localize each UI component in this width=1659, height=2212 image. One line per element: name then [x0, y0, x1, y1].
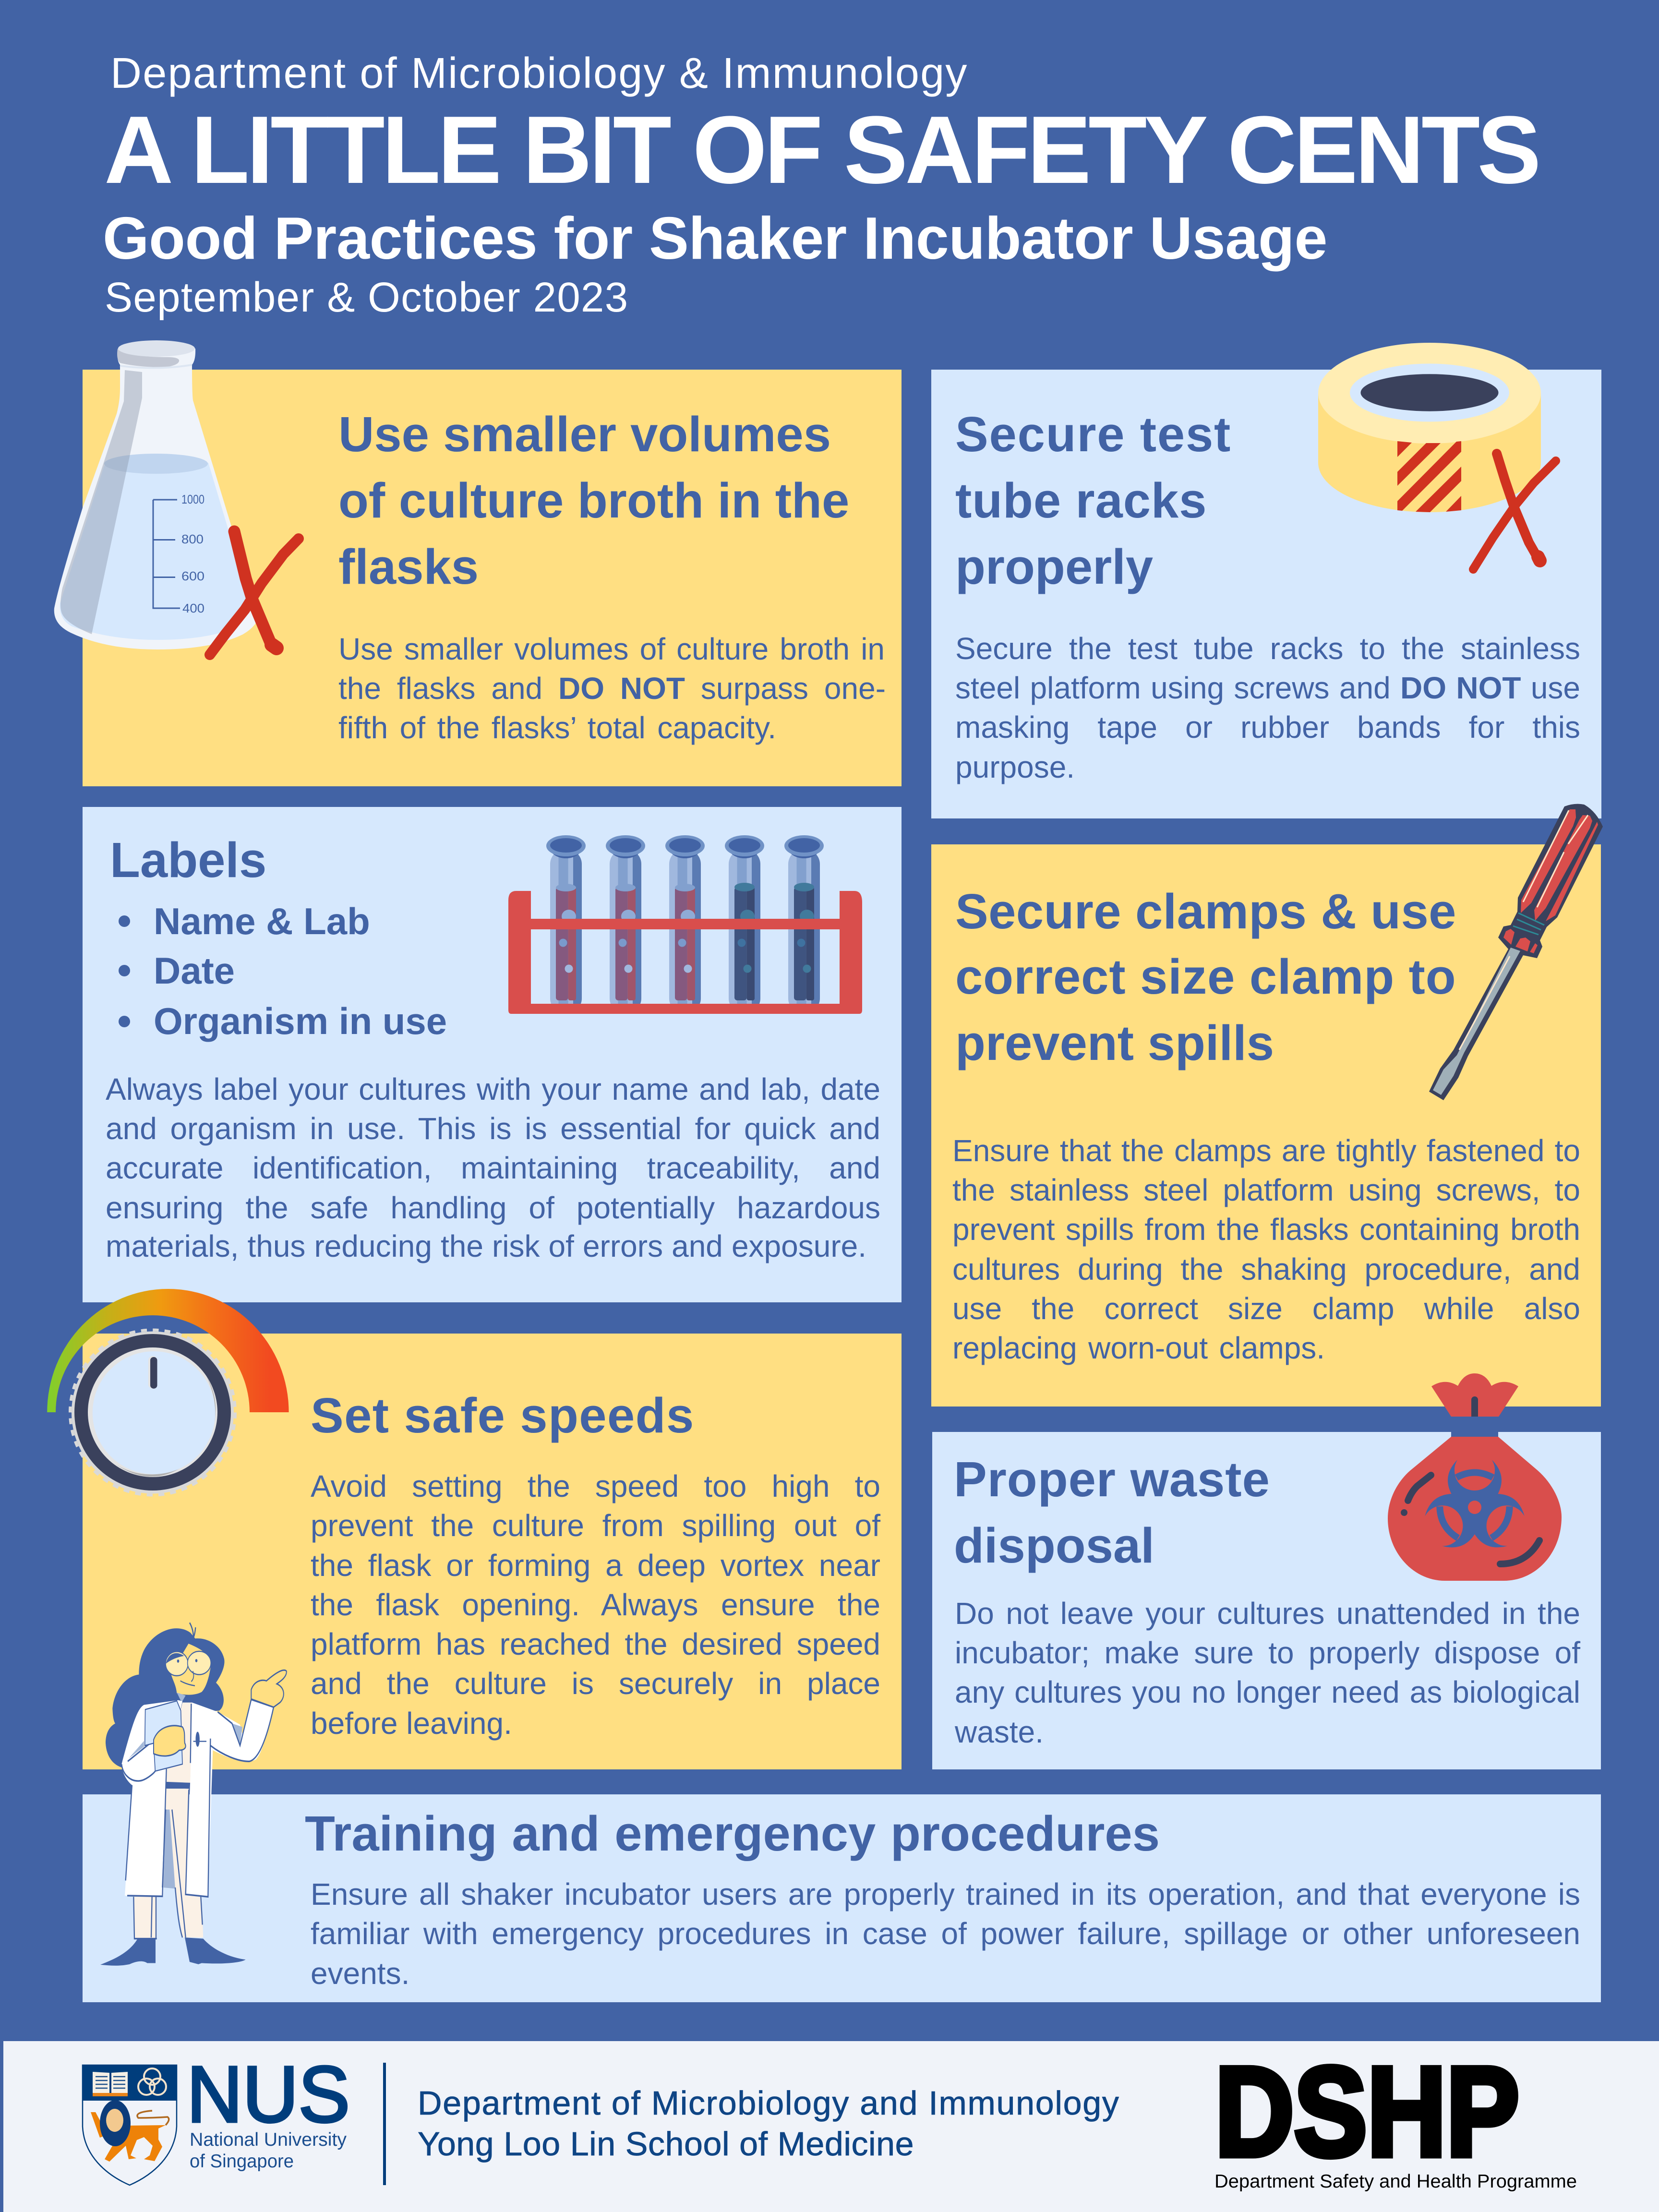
shaft [1433, 948, 1520, 1095]
text: labels: ensuring the safe handling of potentially hazardous [106, 1190, 880, 1225]
flask shading [60, 370, 142, 634]
illustration: scientist pointing [86, 1613, 302, 1978]
pen in pocket [193, 1732, 206, 1747]
panel: test tube racks [931, 370, 1601, 818]
text: smaller volumes: fifth of the flasks’ total capacity. [338, 710, 776, 745]
pointing hand [251, 1670, 287, 1707]
highlights [1459, 810, 1588, 1050]
flask cap [117, 340, 195, 368]
heading: waste disposal: Proper waste [954, 1452, 1270, 1507]
icon: screwdriver [1421, 797, 1608, 1106]
heading: test tube racks [955, 407, 1231, 594]
text: test tube racks: masking tape or rubber bands for this [955, 710, 1580, 745]
tape stripes [1397, 441, 1461, 512]
text: safe speeds: and the culture is securely in place [311, 1666, 880, 1701]
text: waste disposal [954, 1596, 1580, 1749]
heading: smaller volumes: of culture broth in the [338, 473, 849, 528]
text: labels [106, 1072, 880, 1263]
water [60, 454, 250, 640]
heading: waste disposal: disposal [954, 1518, 1154, 1573]
NUS wordmark [187, 2050, 350, 2172]
list: label items: Organism in use [154, 1000, 447, 1042]
red cross [1473, 454, 1556, 569]
knob [70, 1330, 235, 1495]
graduation scale [153, 500, 180, 608]
text: test tube racks: Secure the test tube racks to the stainless [955, 631, 1580, 666]
legs outline [133, 1887, 203, 1939]
NUS wordmark: of Singapore [190, 2151, 294, 2172]
icon: biohazard waste bag [1378, 1368, 1570, 1584]
department name: Department of Microbiology and Immunology [418, 2084, 1120, 2122]
panel: labels [83, 807, 902, 1302]
list: label items: Name & Lab [154, 900, 370, 942]
text: waste disposal: any cultures you no longer need as biological [955, 1675, 1580, 1709]
logo: NUS [79, 2059, 358, 2189]
scale numbers: 400 [182, 601, 204, 615]
text: safe speeds: before leaving. [311, 1706, 512, 1741]
DSHP programme name: Department Safety and Health Programme [1214, 2171, 1577, 2192]
icon: test tube rack [508, 835, 862, 1014]
flask glass [54, 349, 259, 649]
title: A LITTLE BIT OF SAFETY CENTS [104, 96, 1539, 204]
list: label items [119, 900, 447, 1042]
divider [383, 2063, 386, 2185]
text: test tube racks: steel platform using screws and DO NOT use [955, 671, 1580, 705]
scale numbers [181, 492, 204, 615]
text: smaller volumes [338, 632, 886, 745]
heading: smaller volumes: Use smaller volumes [338, 407, 831, 462]
scale numbers: 600 [181, 569, 204, 583]
face [166, 1644, 211, 1703]
icon: flask with red cross [48, 331, 307, 667]
biohazard symbol [1420, 1460, 1529, 1554]
scale numbers: 800 [181, 532, 204, 546]
text: clamps: cultures during the shaking procedure, and [952, 1252, 1580, 1286]
heading: test tube racks: properly [955, 539, 1153, 594]
text: safe speeds: prevent the culture from spilling out of [311, 1508, 880, 1543]
tape roll [1318, 343, 1541, 512]
handle grooves [1503, 809, 1598, 953]
text: safe speeds: the flask opening. Always ensure the [311, 1587, 880, 1622]
department name: Yong Loo Lin School of Medicine [418, 2125, 914, 2163]
text: labels: accurate identification, maintaining traceability, and [106, 1151, 880, 1185]
text: clamps: prevent spills from the flasks containing broth [952, 1212, 1580, 1247]
text: labels: materials, thus reducing the risk of errors and exposure. [106, 1229, 866, 1263]
text: clamps: replacing worn-out clamps. [952, 1331, 1325, 1365]
text: safe speeds: Avoid setting the speed too high to [311, 1469, 880, 1503]
heading: clamps: correct size clamp to [955, 949, 1456, 1004]
list: label items: Date [154, 950, 235, 992]
red cross [210, 531, 299, 655]
text: waste disposal: waste. [955, 1715, 1044, 1749]
lab coat [121, 1699, 274, 1937]
text: waste disposal: Do not leave your cultures unattended in the [955, 1596, 1580, 1631]
gauge arc [47, 1289, 289, 1412]
scale numbers: 1000 [181, 492, 204, 506]
heading: clamps: Secure clamps & use [955, 884, 1456, 939]
subtitle: Good Practices for Shaker Incubator Usage [103, 205, 1327, 272]
heading: test tube racks: Secure test [955, 407, 1231, 462]
panel: waste disposal [932, 1432, 1601, 1769]
department name [418, 2084, 1123, 2165]
footer [3, 2041, 1659, 2212]
department line: Department of Microbiology & Immunology [110, 49, 968, 97]
hand holding clipboard [154, 1726, 186, 1756]
text: training: events. [311, 1956, 409, 1991]
logo: DSHP [1210, 2059, 1584, 2199]
screwdriver outline [1429, 804, 1603, 1100]
text: smaller volumes: Use smaller volumes of culture broth in [338, 632, 885, 666]
text: labels: and organism in use. This is is essential for quick and [106, 1111, 880, 1146]
heading: smaller volumes: flasks [338, 539, 479, 594]
bag highlights [1401, 1475, 1539, 1564]
heading: clamps [955, 884, 1456, 1070]
header [103, 49, 1539, 321]
bag body [1388, 1437, 1562, 1581]
text: clamps: use the correct size clamp while also [952, 1291, 1580, 1326]
heading: labels: Labels [110, 832, 266, 888]
text: test tube racks [955, 631, 1580, 784]
NUS wordmark: National University [190, 2129, 347, 2150]
teal rings [1513, 913, 1544, 935]
test tubes [546, 835, 824, 1013]
text: waste disposal: incubator; make sure to properly dispose of [955, 1635, 1580, 1670]
text: training: Ensure all shaker incubator users are properly trained in its operation, and that everyone is [311, 1877, 1580, 1911]
text: safe speeds: the flask or forming a deep vortex near [311, 1548, 880, 1583]
heading: test tube racks: tube racks [955, 473, 1207, 528]
text: clamps [952, 1133, 1580, 1365]
date: September & October 2023 [105, 274, 629, 321]
panel: clamps [931, 844, 1601, 1407]
icon: speed dial [43, 1286, 293, 1503]
panel: safe speeds [83, 1334, 902, 1769]
shoes [100, 1937, 246, 1966]
heading: training: Training and emergency procedures [305, 1806, 1160, 1861]
text: smaller volumes: the flasks and DO NOT surpass one- [338, 671, 886, 706]
text: training [311, 1875, 1580, 1993]
text: training: familiar with emergency procedures in case of power failure, spillage or other unforeseen [311, 1916, 1580, 1951]
panel: training [83, 1794, 1601, 2002]
text: safe speeds [311, 1469, 880, 1741]
bag tie mark [1471, 1400, 1478, 1417]
trousers and shirt [133, 1703, 203, 1939]
bag tie [1451, 1417, 1498, 1437]
rack frame [508, 891, 862, 1014]
text: labels: Always label your cultures with your name and lab, date [106, 1072, 880, 1106]
panel: smaller volumes [83, 370, 902, 786]
hair [106, 1623, 225, 1767]
heading: safe speeds: Set safe speeds [311, 1388, 695, 1443]
clipboard [145, 1701, 182, 1771]
heading: waste disposal [954, 1452, 1270, 1573]
bag top [1431, 1373, 1518, 1417]
heading: smaller volumes [338, 407, 849, 594]
text: safe speeds: platform has reached the desired speed [311, 1627, 880, 1661]
text: clamps: the stainless steel platform using screws, to [952, 1173, 1580, 1207]
text: clamps: Ensure that the clamps are tightly fastened to [952, 1133, 1580, 1168]
text: test tube racks: purpose. [955, 750, 1075, 784]
NUS shield [83, 2065, 177, 2185]
icon: masking tape with red cross [1306, 336, 1575, 581]
heading: clamps: prevent spills [955, 1015, 1274, 1070]
